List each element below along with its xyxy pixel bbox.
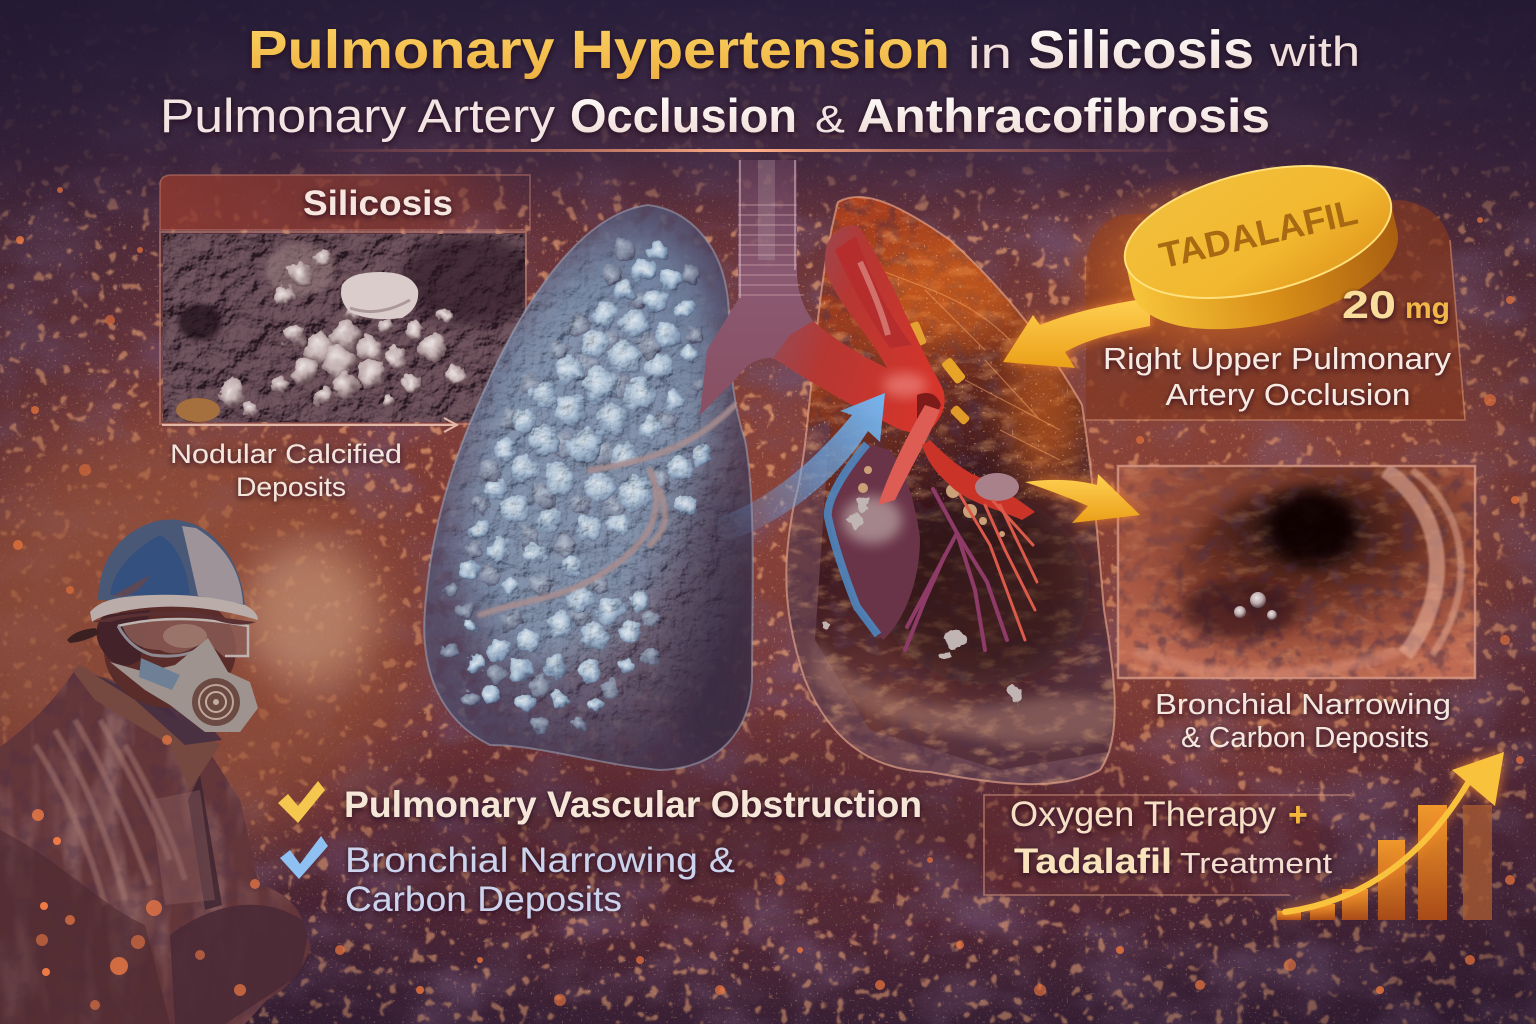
title divider glow <box>300 149 1200 152</box>
caption: nodular calcified deposits <box>170 439 402 502</box>
helmet <box>90 520 258 625</box>
trachea and bronchi <box>700 160 815 415</box>
arrow: growth curve <box>1285 752 1504 912</box>
title: Anthracofibrosis <box>857 89 1270 142</box>
dose <box>1342 284 1450 327</box>
title: & <box>815 99 845 141</box>
panel: bronchus photo <box>1118 466 1475 678</box>
text: bronchial narrowing and carbon deposits <box>345 841 735 919</box>
text: bronchial narrowing and carbon deposits: Bronchial Narrowing & <box>345 841 735 880</box>
text: bronchial narrowing and carbon deposits: Carbon Deposits <box>345 880 622 919</box>
worker <box>0 520 340 1024</box>
bar chart <box>1277 805 1492 920</box>
caption: bronchial narrowing and carbon deposits: & Carbon Deposits <box>1181 722 1429 754</box>
check: bronchial narrowing <box>280 836 735 919</box>
pill: TADALAFIL <box>1155 191 1361 276</box>
halo <box>1060 170 1380 370</box>
caption: right upper pulmonary artery occlusion: Artery Occlusion <box>1166 377 1410 412</box>
text: oxygen therapy plus: Oxygen Therapy <box>1010 795 1277 834</box>
caption: bronchial narrowing and carbon deposits: Bronchial Narrowing <box>1155 689 1451 721</box>
title: Occlusion <box>570 89 797 142</box>
particles over worker <box>32 735 260 1010</box>
caption: nodular calcified deposits: Deposits <box>236 472 346 502</box>
title: Pulmonary Artery <box>160 89 556 142</box>
icon: yellow check <box>278 781 325 823</box>
strap <box>67 628 100 643</box>
text: oxygen therapy plus: + <box>1288 796 1308 834</box>
head <box>104 592 236 708</box>
pulmonary artery <box>773 225 1037 650</box>
jacket <box>0 672 310 1024</box>
nodules <box>461 240 710 712</box>
goggles <box>118 618 248 657</box>
arrow: to bronchus <box>1025 474 1140 523</box>
title: in <box>968 29 1012 78</box>
caption: bronchial narrowing and carbon deposits <box>1155 689 1451 754</box>
right lung <box>780 190 1120 800</box>
right lung deposits <box>820 321 1023 701</box>
caption: nodular calcified deposits: Nodular Calcified <box>170 439 402 469</box>
dose: 20 <box>1342 284 1396 327</box>
pill <box>1112 143 1411 352</box>
silicosis header band <box>160 175 530 230</box>
title <box>160 20 1360 142</box>
panel: silicosis <box>160 175 540 424</box>
bokeh particles <box>13 187 1524 1006</box>
heading: silicosis: Silicosis <box>303 184 453 223</box>
dose: mg <box>1405 292 1450 325</box>
check: vascular obstruction <box>278 781 922 825</box>
text: tadalafil treatment: Treatment <box>1180 848 1332 880</box>
title: with <box>1269 28 1360 75</box>
left lung <box>411 200 769 780</box>
background nodules <box>442 239 709 733</box>
venous sac <box>828 444 920 640</box>
text: tadalafil treatment: Tadalafil <box>1014 842 1172 881</box>
title: Silicosis <box>1028 20 1254 80</box>
panel: tadalafil <box>1003 143 1465 420</box>
caption: right upper pulmonary artery occlusion: Right Upper Pulmonary <box>1103 341 1452 376</box>
collar <box>72 665 220 790</box>
panel: oxygen therapy and tadalafil treatment <box>984 752 1504 920</box>
icon: blue check <box>280 836 328 879</box>
large rock <box>341 272 418 319</box>
arrow: silicosis to lung <box>162 418 457 432</box>
respirator <box>110 638 258 732</box>
text: tadalafil treatment <box>1014 842 1332 881</box>
arrow: pill to artery <box>1003 298 1150 368</box>
text: pulmonary vascular obstruction: Pulmonary Vascular Obstruction <box>344 784 922 825</box>
title: Pulmonary Hypertension <box>248 20 950 80</box>
silicosis rock photo <box>160 232 540 424</box>
arrow: blue <box>713 393 885 545</box>
caption: right upper pulmonary artery occlusion <box>1103 341 1452 412</box>
